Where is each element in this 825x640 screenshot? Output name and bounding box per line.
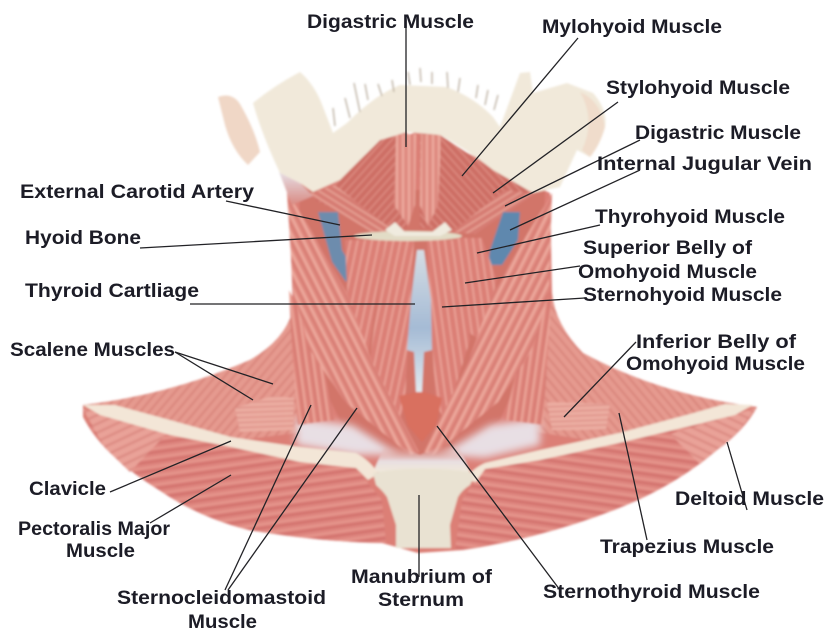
left trapezius and scalene area (83, 310, 304, 440)
label: inferior belly of omohyoid: Omohyoid Muscle (626, 353, 805, 375)
left neck highlight (279, 172, 313, 205)
thyroid gland (399, 392, 442, 442)
label: digastric top: Digastric Muscle (307, 11, 474, 33)
right clavicle (466, 404, 753, 482)
label: manubrium of sternum: Sternum (378, 589, 464, 611)
deep neck muscles (296, 190, 545, 470)
label: internal jugular vein: Internal Jugular Vein (597, 153, 812, 175)
label: hyoid bone: Hyoid Bone (25, 227, 141, 249)
left sternocleidomastoid (287, 192, 419, 455)
label: sternothyroid: Sternothyroid Muscle (543, 581, 760, 603)
left deltoid (83, 409, 170, 472)
label: sternohyoid: Sternohyoid Muscle (583, 284, 782, 306)
right sternohyoid (427, 240, 470, 420)
hyoid tendons (385, 222, 452, 236)
label: trapezius: Trapezius Muscle (600, 536, 774, 558)
label: pectoralis major: Pectoralis Major (18, 518, 170, 540)
label: mylohyoid: Mylohyoid Muscle (542, 16, 722, 38)
mandible (253, 72, 606, 193)
left tendon fade (296, 418, 400, 455)
left sternohyoid (370, 240, 414, 430)
right ear shading (580, 92, 605, 157)
label: thyroid cartilage: Thyroid Cartliage (25, 280, 199, 302)
floor of mouth muscle right (420, 132, 533, 228)
label: deltoid: Deltoid Muscle (675, 488, 824, 510)
neck and shoulder base (83, 130, 757, 553)
label: superior belly of omohyoid: Superior Belly of (583, 237, 753, 259)
label: sternocleidomastoid: Sternocleidomastoid (117, 587, 326, 609)
label: stylohyoid: Stylohyoid Muscle (606, 77, 790, 99)
right trapezius and scalene area (536, 293, 757, 442)
internal jugular vein left (318, 212, 354, 282)
label: manubrium of sternum: Manubrium of (351, 566, 493, 588)
posterior digastric left (308, 185, 395, 234)
label: thyrohyoid: Thyrohyoid Muscle (595, 206, 785, 228)
label: digastric right: Digastric Muscle (635, 122, 801, 144)
label: external carotid artery: External Carotid Artery (20, 181, 254, 203)
left ear lobe (218, 96, 260, 165)
label: pectoralis major: Muscle (66, 540, 135, 562)
anatomy illustration (83, 68, 757, 553)
right inferior omohyoid belly (547, 402, 610, 430)
left omohyoid superior belly (345, 240, 385, 355)
label: scalene muscles: Scalene Muscles (10, 339, 175, 361)
lower tendons centre (373, 445, 470, 472)
right thyrohyoid and omohyoid (455, 238, 497, 340)
leader lines (110, 20, 747, 590)
internal jugular vein right (488, 212, 520, 265)
right sternocleidomastoid clavicular head (505, 290, 552, 425)
right pectoralis major (455, 418, 738, 550)
label: inferior belly of omohyoid: Inferior Belly of (636, 331, 797, 353)
left sternocleidomastoid clavicular head (289, 290, 335, 425)
right deltoid (670, 408, 756, 464)
floor of mouth muscle left (315, 132, 407, 228)
manubrium of sternum (373, 468, 476, 548)
right tendon fade (440, 418, 540, 458)
right sternocleidomastoid (424, 193, 552, 455)
teeth (333, 68, 498, 126)
trachea and thyroid cartilage (407, 250, 432, 392)
left pectoralis major (88, 418, 386, 543)
label: superior belly of omohyoid: Omohyoid Muscle (578, 261, 757, 283)
label: clavicle: Clavicle (29, 478, 106, 500)
posterior digastric right (452, 190, 535, 234)
hyoid bone (354, 231, 462, 241)
anterior digastric left (394, 134, 416, 226)
left clavicle (83, 405, 378, 480)
label: sternocleidomastoid: Muscle (188, 611, 257, 633)
anterior digastric right (420, 134, 441, 226)
left inferior omohyoid belly (235, 396, 294, 432)
